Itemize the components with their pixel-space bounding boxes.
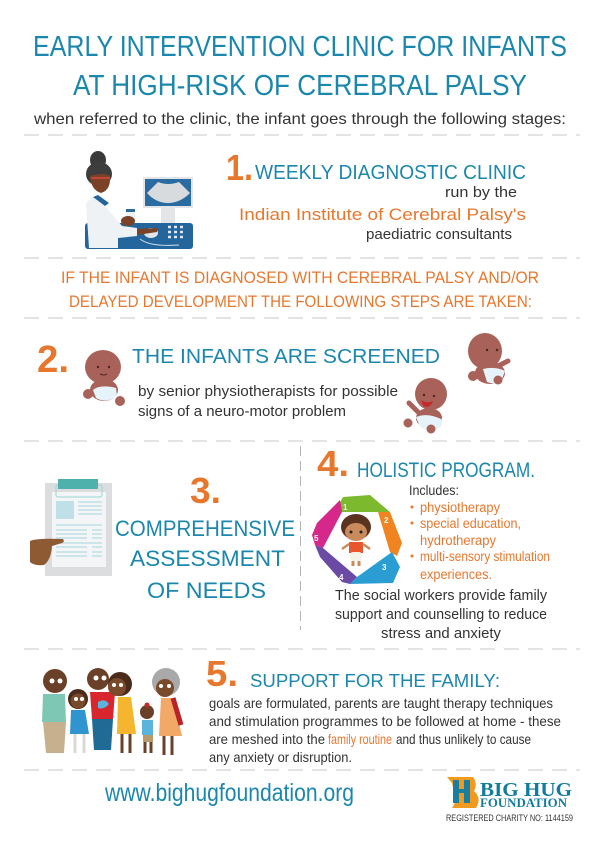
logo: Big Hug Foundation (446, 777, 573, 823)
step 1 number: 1. (226, 147, 253, 188)
icon: baby top right (468, 333, 508, 384)
step 2 number: 2. (37, 339, 69, 381)
icon: doctor at ultrasound machine (85, 151, 193, 249)
step 4 includes list: multi-sensory stimulation (420, 549, 550, 564)
step 3 heading (115, 516, 295, 603)
icon: clipboard and pointing hand (30, 479, 112, 576)
step 5 text: and thus unlikely to cause (396, 731, 531, 747)
step 5 text (209, 695, 561, 765)
step 3 heading: ASSESSMENT (130, 546, 285, 571)
step 5 text: and stimulation programmes to be followed at home - these (209, 713, 561, 729)
step 4 includes list (409, 483, 550, 582)
step 4 includes list: hydrotherapy (420, 533, 496, 548)
orange notice: IF THE INFANT IS DIAGNOSED WITH CEREBRAL PALSY AND/OR (61, 268, 539, 287)
step 4 includes list: Includes: (409, 483, 459, 498)
icon: five-stage wheel with child: 2 (384, 516, 389, 525)
step 1 text (239, 184, 526, 243)
step 1 heading: WEEKLY DIAGNOSTIC CLINIC (255, 162, 526, 184)
step 2 text (138, 383, 398, 420)
step 1 text: run by the (445, 184, 517, 201)
logo: Big Hug Foundation: BIG HUG (480, 779, 572, 801)
step 4 number: 4. (317, 443, 349, 484)
step 4 includes list: experiences. (420, 567, 492, 582)
step 2 heading: THE INFANTS ARE SCREENED (132, 346, 440, 368)
step 3 number: 3. (190, 470, 221, 511)
icon: five-stage wheel with child (312, 495, 402, 584)
website url: www.bighugfoundation.org (104, 779, 354, 807)
step 1 text: paediatric consultants (366, 226, 512, 243)
step 4 social workers text (335, 587, 547, 642)
title: AT HIGH-RISK OF CEREBRAL PALSY (73, 70, 527, 102)
step 1 text: Indian Institute of Cerebral Palsy's (239, 205, 526, 224)
step 4 heading: HOLISTIC PROGRAM. (357, 459, 535, 482)
step 4 social workers text: stress and anxiety (381, 625, 501, 642)
step 5 text: family routine (328, 731, 392, 747)
icon: baby left (83, 350, 125, 406)
logo: Big Hug Foundation: FOUNDATION (480, 796, 567, 810)
step 5 text: are meshed into the (209, 731, 325, 747)
step 5 text: goals are formulated, parents are taught therapy techniques (209, 695, 553, 711)
step 5 heading: SUPPORT FOR THE FAMILY: (250, 671, 500, 691)
step 4 social workers text: support and counselling to reduce (335, 606, 547, 623)
step 5 number: 5. (206, 653, 238, 694)
icon: five-stage wheel with child: 5 (314, 534, 319, 543)
icon: five-stage wheel with child: 4 (339, 573, 344, 582)
subtitle: when referred to the clinic, the infant goes through the following stages: (33, 111, 566, 128)
icon: baby bottom right (404, 378, 447, 434)
orange notice: DELAYED DEVELOPMENT THE FOLLOWING STEPS ARE TAKEN: (69, 292, 532, 311)
title (33, 31, 567, 102)
step 4 social workers text: The social workers provide family (335, 587, 547, 604)
icon: family group (42, 668, 182, 755)
icon: five-stage wheel with child: 3 (382, 563, 387, 572)
step 5 text: any anxiety or disruption. (209, 749, 352, 765)
step 2 text: signs of a neuro-motor problem (138, 403, 346, 420)
step 3 heading: OF NEEDS (147, 578, 266, 603)
orange notice (61, 268, 539, 311)
icon: five-stage wheel with child: 1 (343, 503, 348, 512)
step 4 includes list: special education, (420, 516, 521, 531)
step 4 includes list: physiotherapy (420, 500, 500, 515)
step 2 text: by senior physiotherapists for possible (138, 383, 398, 400)
step 3 heading: COMPREHENSIVE (115, 516, 295, 541)
logo: Big Hug Foundation: REGISTERED CHARITY NO: 1144159 (446, 813, 573, 823)
